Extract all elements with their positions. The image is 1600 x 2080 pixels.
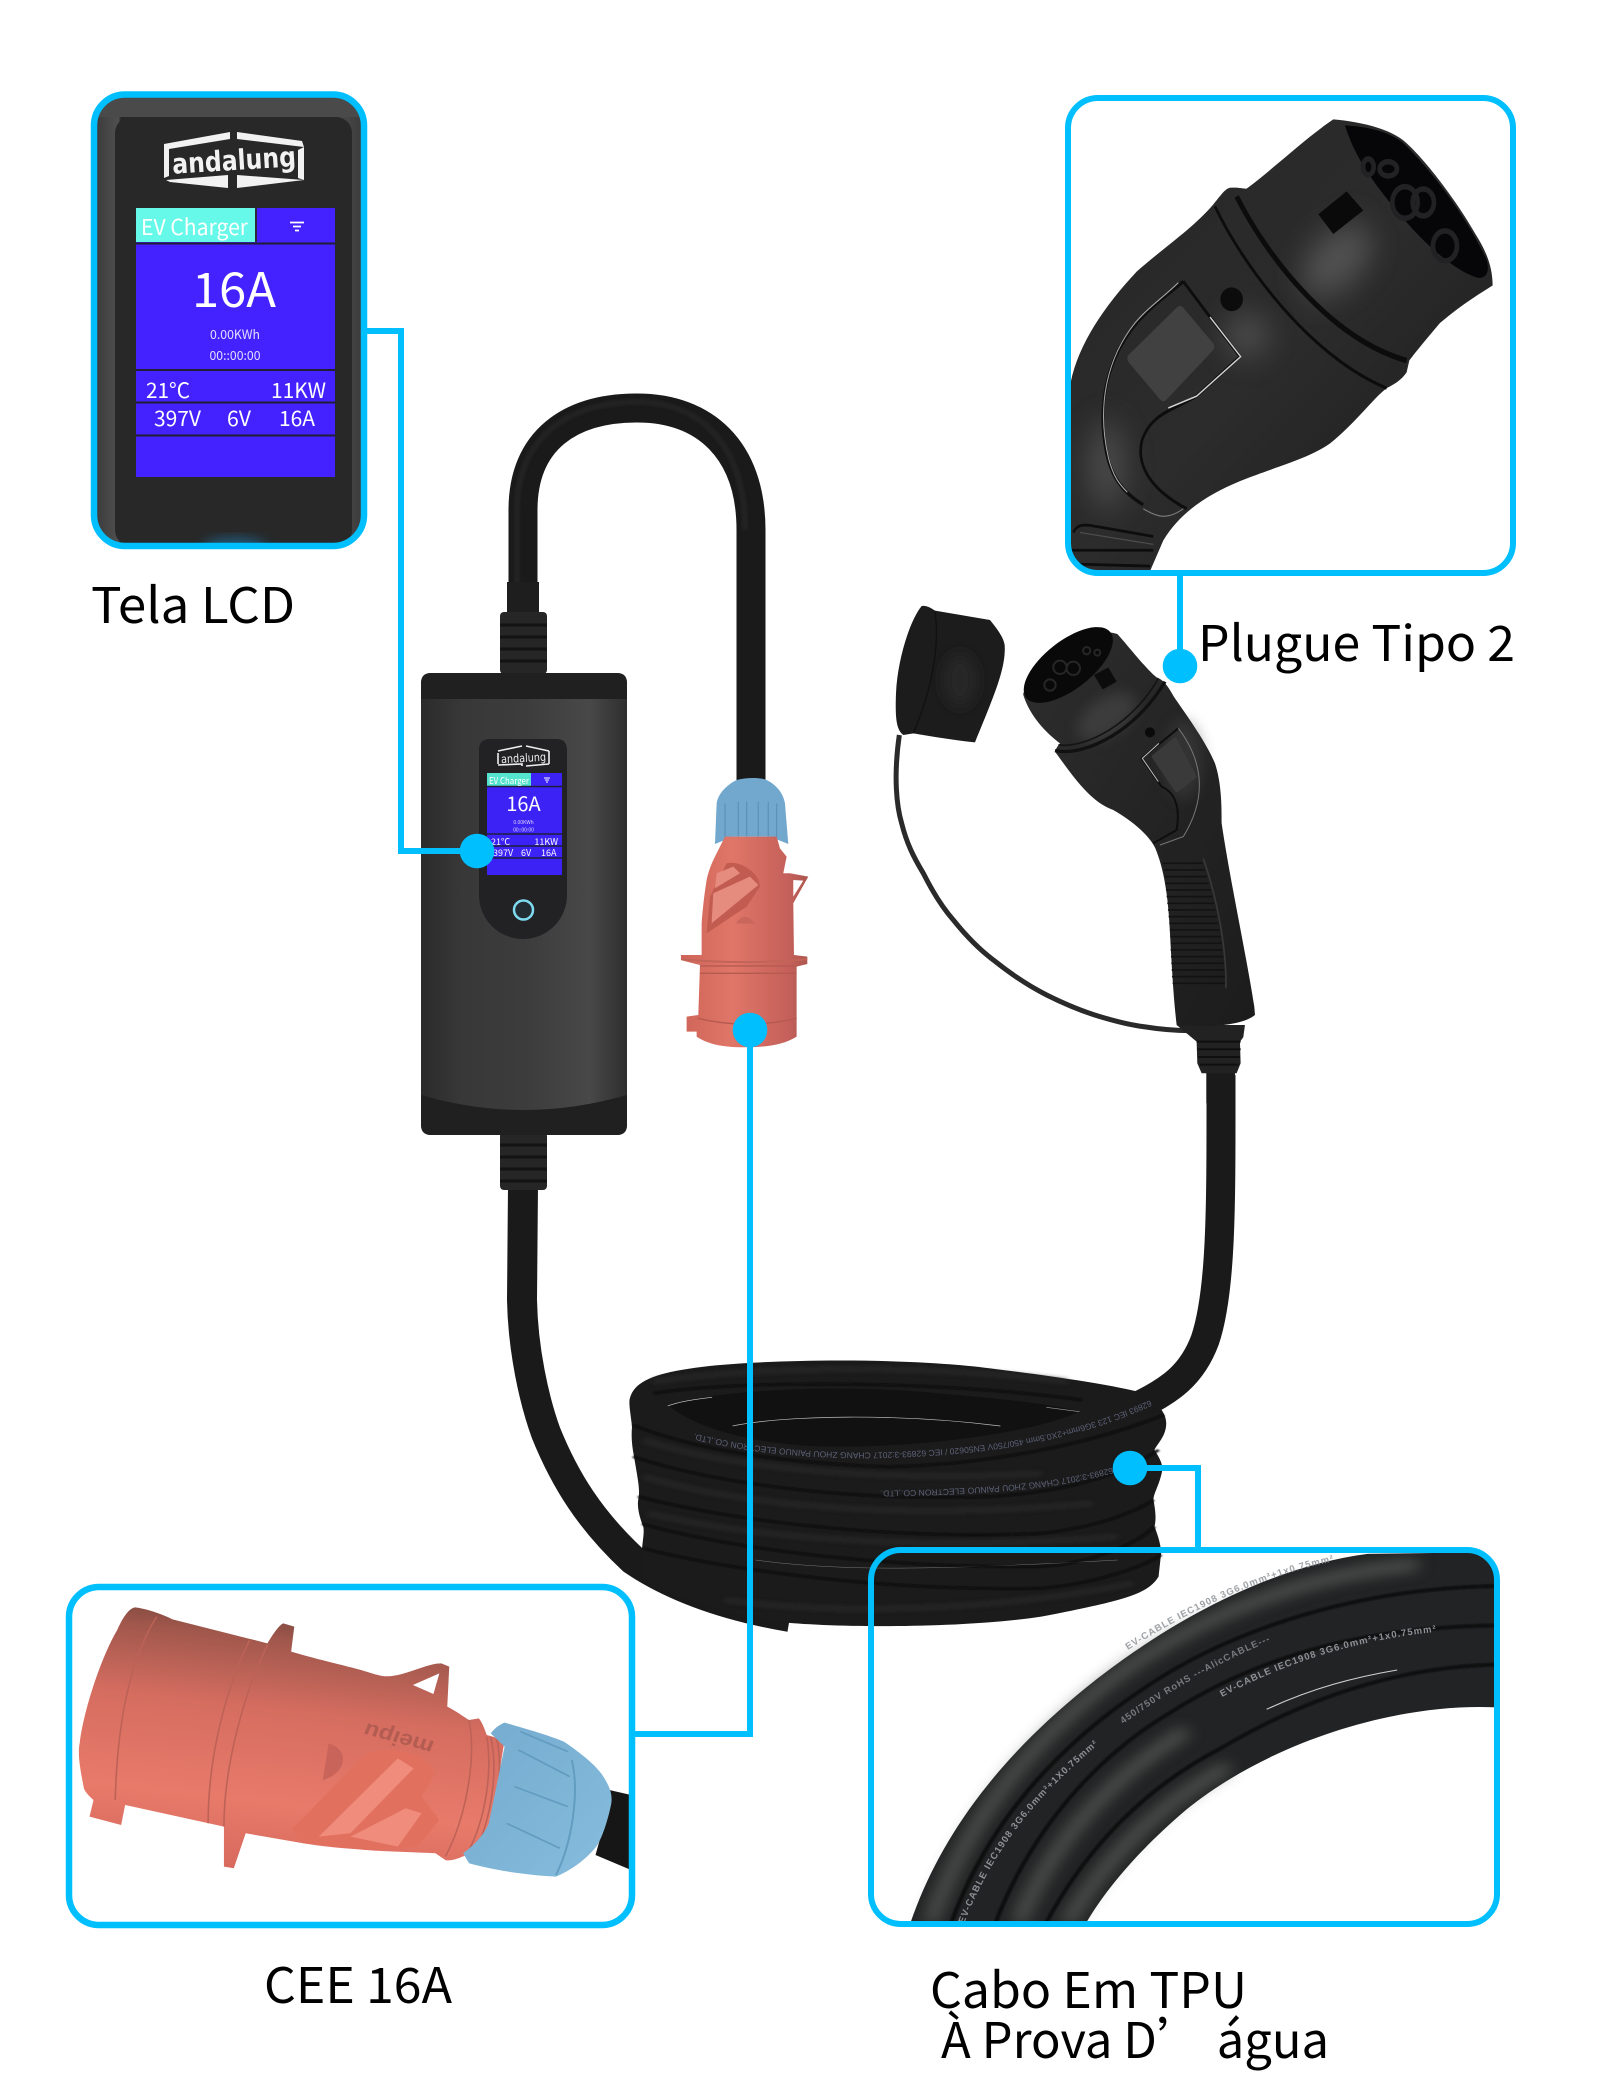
LED dot bbox=[1220, 287, 1243, 311]
mini LCD screen: 397V bbox=[493, 846, 514, 859]
brand logo bbox=[164, 132, 304, 188]
collar band bbox=[1055, 682, 1165, 751]
connector dot: CEE plug bbox=[733, 1013, 767, 1047]
red plug body bbox=[79, 1607, 505, 1868]
brand logo: andalung bbox=[171, 140, 297, 181]
handle body bbox=[1023, 632, 1255, 1026]
LCD screen bbox=[136, 208, 335, 477]
protective cap bbox=[896, 606, 1005, 742]
connector: coil to cable panel bbox=[1130, 1468, 1198, 1550]
trigger panel bbox=[1153, 739, 1195, 791]
mini LCD screen: 11KW bbox=[534, 835, 558, 848]
CP voltage: 6V bbox=[227, 403, 252, 433]
panel: CEE 16A plug detail bbox=[69, 1587, 632, 1925]
panel: TPU cable detail bbox=[868, 1547, 1500, 1927]
amperage: 16A bbox=[279, 403, 315, 433]
time reading: 00::00:00 bbox=[210, 345, 261, 364]
label: Cabo Em TPU À Prova D'água: À Prova D’ água bbox=[941, 2002, 1329, 2073]
display module bbox=[479, 739, 567, 939]
connector dot: Type 2 plug bbox=[1163, 649, 1197, 683]
cable printing bbox=[694, 1400, 1152, 1496]
cable coil bbox=[629, 1075, 1236, 1626]
mini LCD screen: 16A bbox=[506, 788, 542, 817]
latch slot bbox=[1094, 667, 1117, 689]
power: 11KW bbox=[271, 375, 326, 405]
control box bbox=[421, 673, 627, 1135]
mini LCD screen: 6V bbox=[521, 846, 532, 859]
bottom ribs bbox=[1072, 525, 1153, 566]
cable: upper loop to CEE plug bbox=[517, 402, 751, 795]
mini LCD screen: EV Charger bbox=[489, 774, 529, 787]
collar band bbox=[1215, 206, 1387, 388]
cable printing: EV-CABLE IEC1908 3G6.0mm²+1x0.75mm² bbox=[1220, 1625, 1436, 1697]
handle strain relief bbox=[1177, 1025, 1245, 1073]
mini LCD screen bbox=[487, 773, 562, 875]
cable printing: EV-CABLE IEC1908 3G6.0mm²+1X0.75mm² bbox=[958, 1740, 1096, 1921]
temperature: 21°C bbox=[146, 375, 190, 405]
plug face bbox=[1345, 125, 1488, 278]
cable printing: EV-CABLE IEC1908 3G6.0mm²+1x0.75mm² bbox=[1125, 1555, 1333, 1650]
label: Plugue Tipo 2: Plugue Tipo 2 bbox=[1198, 605, 1515, 676]
mini logo: andalung bbox=[501, 750, 546, 766]
connector dot: coil bbox=[1113, 1451, 1147, 1485]
trigger panel bbox=[1132, 311, 1210, 396]
connector: Type 2 plug to panel bbox=[1177, 576, 1183, 666]
mini LCD screen: 16A bbox=[541, 846, 557, 859]
label: Cabo Em TPU À Prova D'água bbox=[930, 1952, 1329, 2073]
blue nut bbox=[463, 1723, 612, 1877]
connector: CEE plug to panel bbox=[634, 1030, 750, 1734]
cable: lower from control box to coil bbox=[522, 1185, 790, 1617]
mini LCD screen: 0.00KWh bbox=[513, 819, 534, 826]
ground icon bbox=[290, 222, 304, 230]
strain relief: bottom of control box bbox=[500, 1132, 547, 1190]
title tab text: EV Charger bbox=[141, 210, 248, 242]
cable printing: 450/750V RoHS ---AlicCABLE--- bbox=[1122, 1638, 1269, 1723]
LED dot bbox=[1145, 727, 1155, 737]
energy reading: 0.00KWh bbox=[210, 324, 260, 343]
panel: Type 2 plug detail bbox=[1068, 98, 1513, 573]
connector dot: screen bbox=[460, 834, 494, 868]
panel: LCD display detail bbox=[94, 94, 364, 558]
grip ribs bbox=[1163, 863, 1225, 983]
embossed brand: meipu bbox=[360, 1719, 437, 1760]
mini LCD screen: 00::00:00 bbox=[513, 826, 534, 834]
mini LCD screen: 21°C bbox=[491, 835, 510, 848]
voltage: 397V bbox=[154, 403, 202, 433]
top cap bbox=[421, 673, 627, 699]
label: Tela LCD: Tela LCD bbox=[91, 567, 295, 638]
cable stub below handle bbox=[1178, 1060, 1264, 1103]
latch slot bbox=[1318, 191, 1363, 234]
cable printing: IEC 62893-3:2017 CHANG ZHOU PAINUO ELECTRON CO.,LTD. bbox=[881, 1468, 1113, 1496]
plug grip recess bbox=[300, 1780, 439, 1850]
plug face bbox=[1012, 613, 1125, 717]
bottom cap bbox=[421, 1095, 627, 1135]
connector: LCD panel to screen bbox=[367, 331, 477, 851]
blue nut bbox=[715, 778, 788, 844]
current reading: 16A bbox=[192, 251, 276, 321]
red body bbox=[681, 837, 808, 1047]
strain relief: top of control box bbox=[500, 582, 547, 674]
cable printing: 62893 IEC 123 3G6mm+2X0.5mm 450/750V EN50620 / IEC 62893-3:2017 CHANG ZHOU PAINUO ELECTRON CO.,LTD. bbox=[694, 1400, 1152, 1458]
CEE plug (main product) bbox=[681, 778, 808, 1047]
label: Cabo Em TPU À Prova D'água: Cabo Em TPU bbox=[930, 1952, 1247, 2023]
cap tether bbox=[896, 735, 1190, 1031]
cable stub bbox=[596, 1790, 631, 1870]
cable printing bbox=[958, 1555, 1436, 1921]
Type 2 plug with cap bbox=[896, 606, 1255, 1103]
power button ring bbox=[514, 900, 533, 920]
label: CEE 16A: CEE 16A bbox=[264, 1947, 452, 2018]
